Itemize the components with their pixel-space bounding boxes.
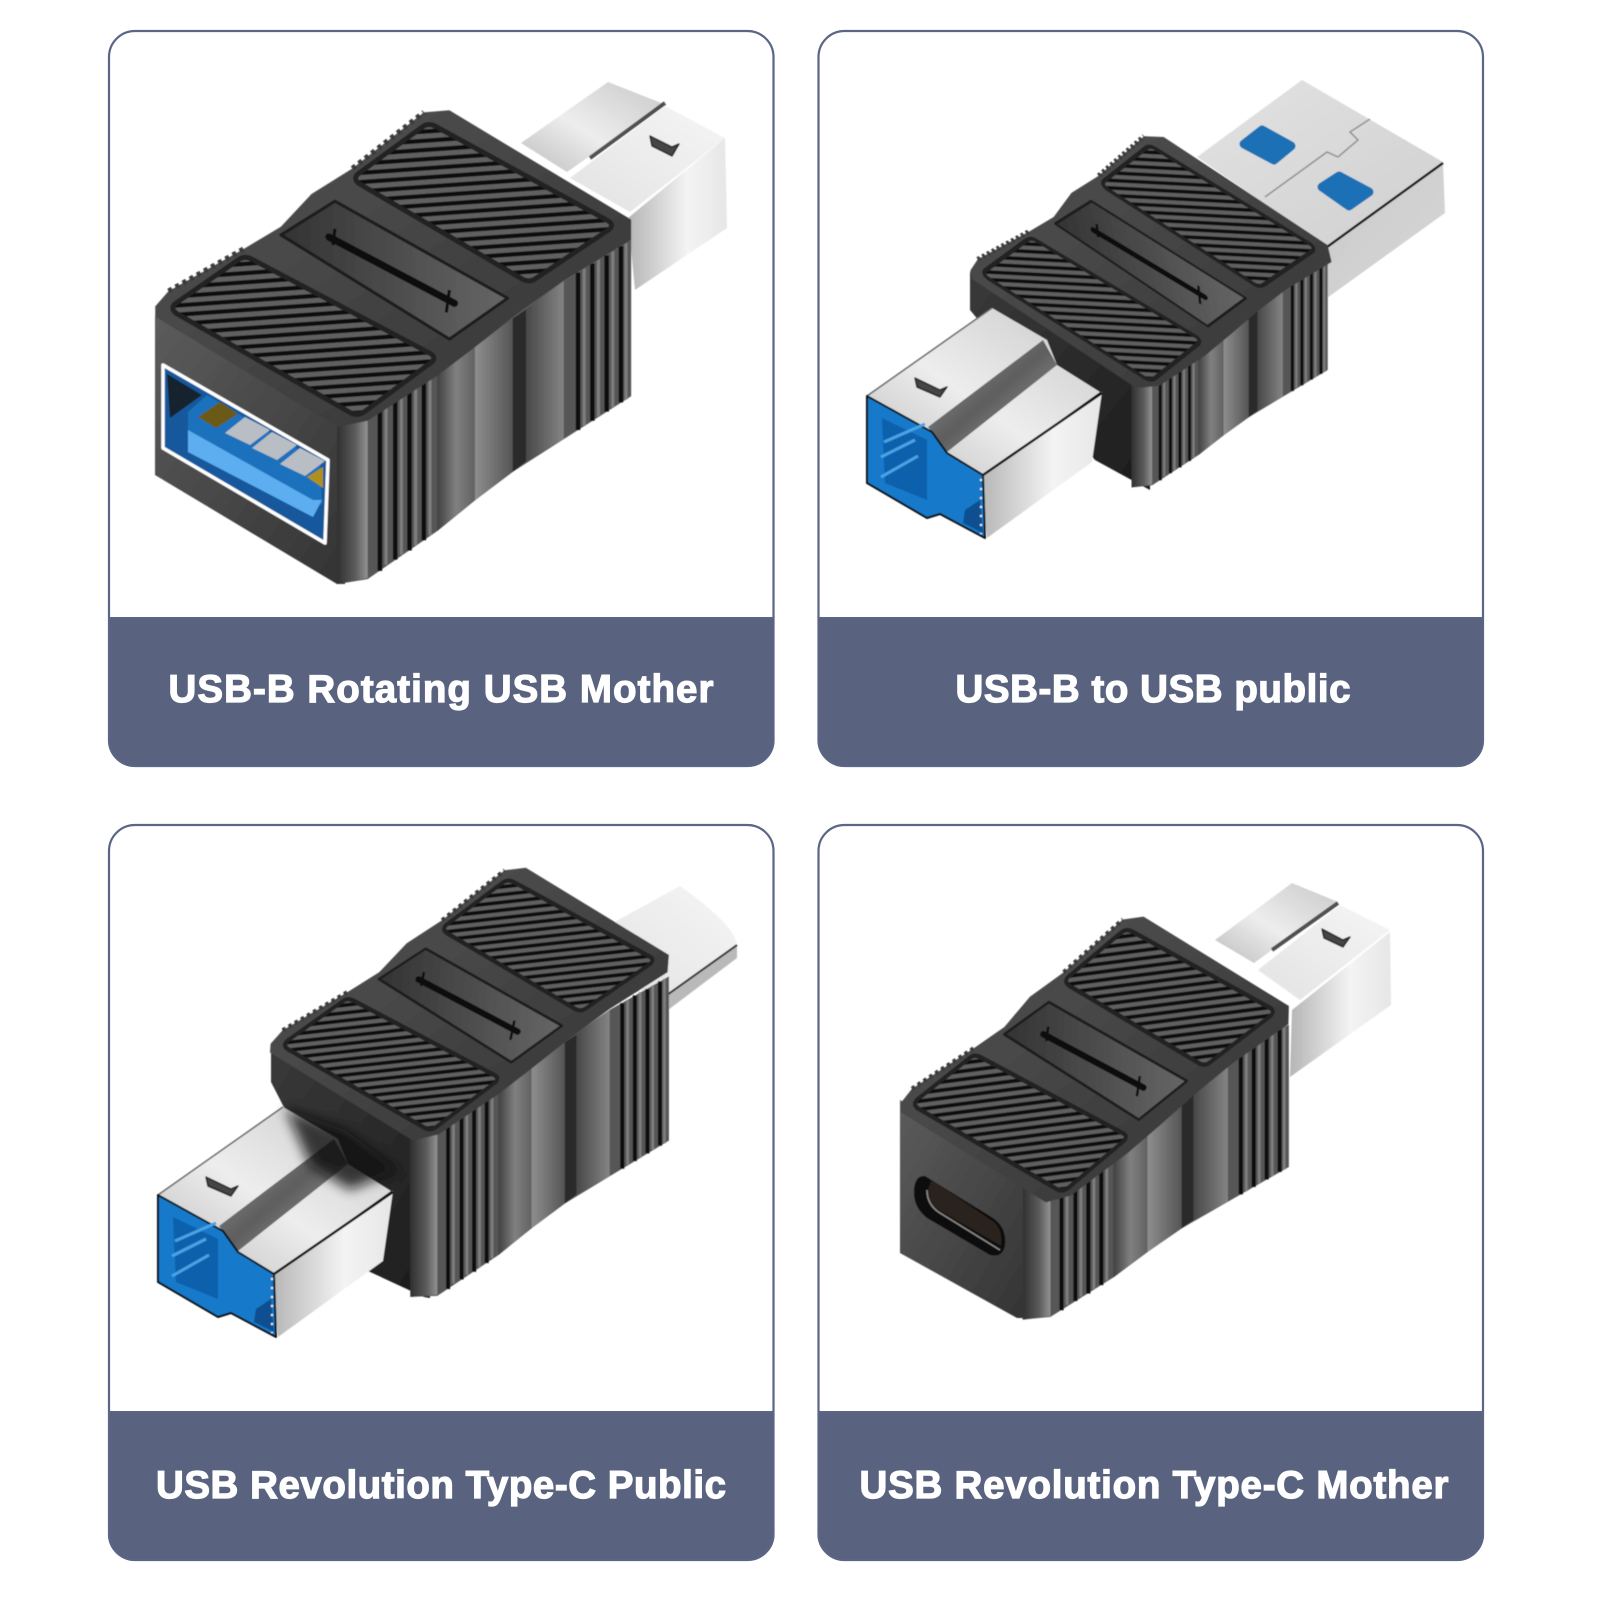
panel frame <box>818 31 1483 766</box>
silver USB-A plug <box>1197 80 1445 298</box>
panel: USB Revolution Type-C Public <box>109 825 774 1560</box>
ribbed top face <box>932 108 1368 417</box>
rubber body side with ribs <box>1132 244 1328 503</box>
silver USB-B plug rear <box>521 82 727 290</box>
rubber body front face <box>155 316 345 584</box>
caption band <box>109 1412 774 1560</box>
panel frame <box>109 31 774 766</box>
USB-C female port <box>914 1176 1005 1256</box>
panel: USB-B to USB public <box>818 31 1483 766</box>
silver USB-B plug with blue insert <box>867 308 1102 538</box>
caption band <box>818 1412 1483 1560</box>
rubber body side with ribs <box>410 935 669 1338</box>
caption: USB Revolution Type-C Public <box>156 1464 726 1507</box>
panel frame <box>109 825 774 1560</box>
product: USB-A male to USB-B male adapter <box>867 80 1445 538</box>
silver USB-B plug with blue insert <box>158 1107 393 1337</box>
caption: USB-B to USB public <box>956 668 1350 711</box>
product: USB-C female to USB-B adapter <box>898 883 1391 1338</box>
shadow on plug near body <box>285 1108 398 1190</box>
caption: USB Revolution Type-C Mother <box>860 1464 1449 1507</box>
silver USB-B plug rear <box>1215 883 1391 1077</box>
caption band <box>109 618 774 766</box>
USB-A female port <box>163 365 328 543</box>
ribbed top face <box>898 909 1291 1210</box>
panel: USB Revolution Type-C Mother <box>818 825 1483 1560</box>
caption: USB-B Rotating USB Mother <box>168 668 714 711</box>
rubber body side with ribs <box>1023 1006 1289 1338</box>
rubber body front face <box>900 1100 1030 1318</box>
caption band <box>818 618 1483 766</box>
rubber body front face <box>970 272 1150 490</box>
rubber body side with ribs <box>337 240 631 584</box>
product: USB-C male to USB-B male adapter <box>158 862 737 1338</box>
rubber body front face <box>271 1044 430 1298</box>
ribbed top face <box>263 862 676 1146</box>
silver USB-C plug <box>600 886 737 1016</box>
ribbed top face <box>155 110 631 427</box>
panel: USB-B Rotating USB Mother <box>109 31 774 766</box>
product: USB-A female to USB-B adapter <box>155 82 727 584</box>
panel frame <box>818 825 1483 1560</box>
